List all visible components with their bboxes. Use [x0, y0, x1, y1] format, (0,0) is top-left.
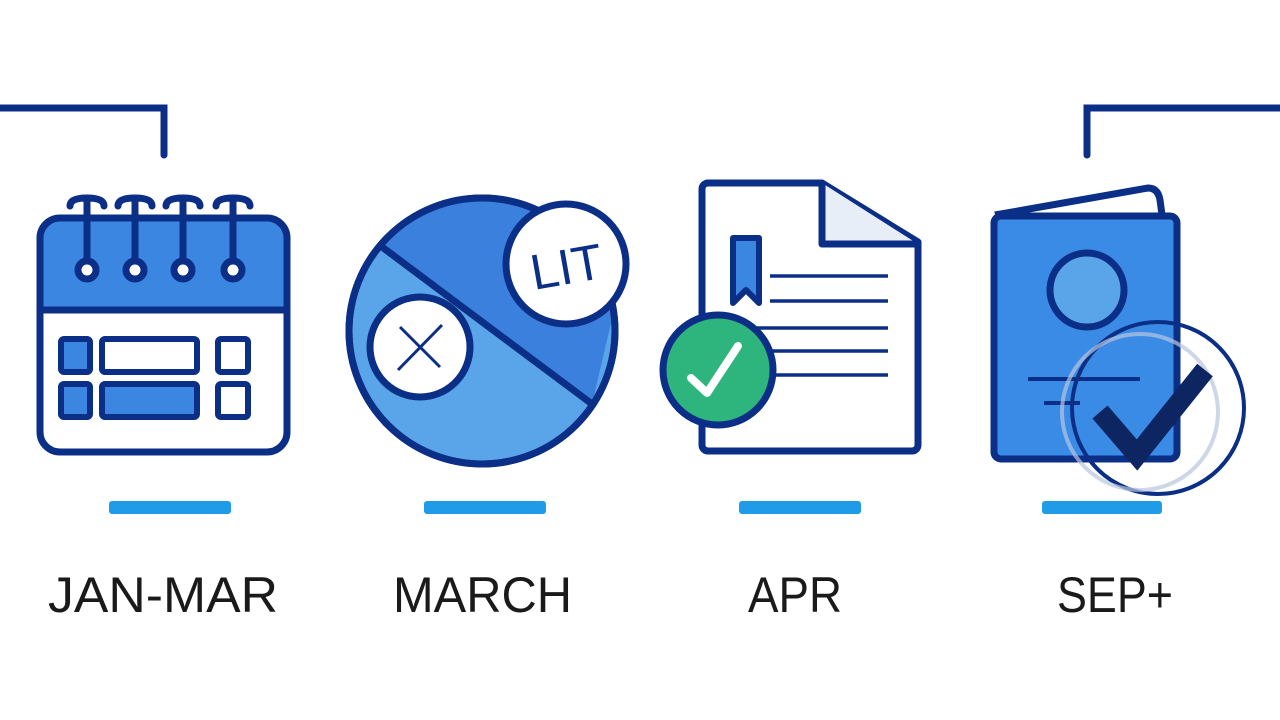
- icon: document with check: [663, 183, 918, 451]
- icon: pie chart: LIT: [526, 233, 607, 301]
- icon: passport with check: [994, 188, 1244, 494]
- label: JAN-MAR: JAN-MAR: [48, 567, 278, 623]
- label: APR: APR: [748, 567, 842, 623]
- label: SEP+: SEP+: [1057, 567, 1173, 623]
- bracket: left: [0, 108, 164, 155]
- icon: calendar: [40, 198, 287, 452]
- label: MARCH: MARCH: [393, 567, 572, 623]
- icon: pie chart: [330, 198, 640, 464]
- accent bars: [109, 501, 1162, 514]
- bracket: right: [1087, 108, 1280, 155]
